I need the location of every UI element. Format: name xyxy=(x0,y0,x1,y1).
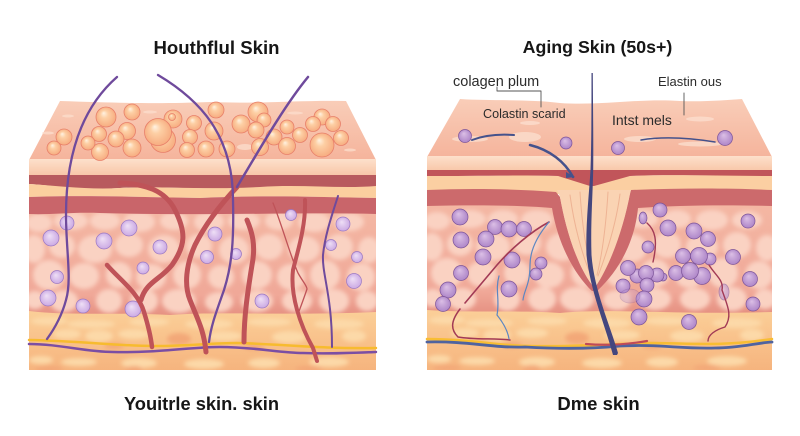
blood vessels xyxy=(107,183,317,361)
lilac cells xyxy=(40,210,362,317)
label: collagen plum: colagen plum xyxy=(453,74,539,90)
yellow nerve xyxy=(427,339,772,346)
label: colastin scarid: Colastin scarid xyxy=(483,107,566,121)
upper dermis bands xyxy=(427,170,772,194)
blue capillaries xyxy=(497,222,549,339)
upper dermis bands xyxy=(29,175,376,214)
arrow tip xyxy=(566,172,575,178)
fat layer xyxy=(427,310,772,373)
caption: aging skin: Dme skin xyxy=(557,393,640,414)
red capillaries xyxy=(453,222,729,341)
surface texture xyxy=(452,116,722,146)
deep wrinkle groove xyxy=(427,188,772,291)
leader lines xyxy=(497,87,684,115)
epidermis front xyxy=(29,159,376,176)
panel: youthful skin cross-section xyxy=(23,75,380,374)
red vessel at base xyxy=(586,341,647,345)
surface blue fibres xyxy=(472,135,715,177)
purple vein xyxy=(29,344,376,353)
lilac cells xyxy=(436,130,760,330)
fat layer xyxy=(29,311,376,374)
surface layer xyxy=(29,101,376,160)
epidermis front xyxy=(427,156,772,172)
dermis cells xyxy=(421,200,778,315)
label: intst mels: Intst mels xyxy=(612,112,672,128)
title: aging skin: Aging Skin (50s+) xyxy=(523,37,672,57)
surface layer xyxy=(427,99,772,157)
title: youthful skin: Houthflul Skin xyxy=(153,37,280,58)
blue vein xyxy=(427,342,772,348)
caption: youthful skin: Youitrle skin. skin xyxy=(124,393,279,414)
dark blue hair shaft xyxy=(586,73,618,355)
surface texture xyxy=(42,110,356,152)
purple hairs xyxy=(47,75,338,347)
panel: aging skin cross-section xyxy=(421,73,778,373)
oil and collagen spheres xyxy=(47,102,348,160)
label: elastin ous: Elastin ous xyxy=(658,74,722,89)
yellow nerve xyxy=(29,340,376,348)
dermis cells xyxy=(29,212,376,315)
